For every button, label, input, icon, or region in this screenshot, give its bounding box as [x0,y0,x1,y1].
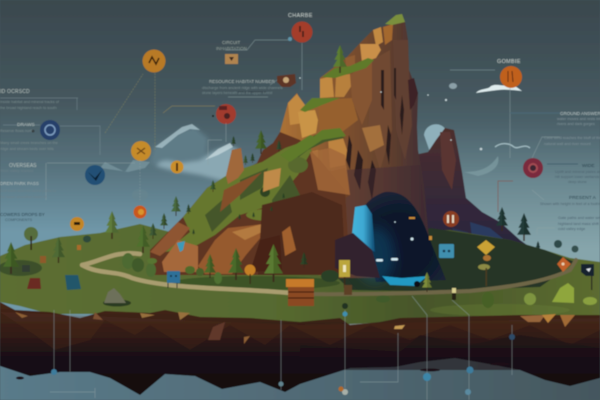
red sign [27,278,41,289]
text block: right column: deep stone [568,180,587,184]
icon: crimson badge [523,158,543,178]
text block: left column two: COWERS DROPS BY [0,212,45,217]
floating sky particles [299,77,482,150]
text block: right column: WIDE [582,163,595,169]
text block: upper centre caption: RESOURCE HABITAT NUMBER [209,79,276,84]
text block: left column two: River valley marked [0,169,33,173]
text block: left column one: Many small creek branches on the [0,141,58,145]
icon: amber badge [131,141,151,161]
text block: left column two: OVERSEAS [9,163,37,169]
text block: right column: cold valley edge [558,227,585,231]
icon: orange diamond sign [557,257,571,272]
text block: right column: PRESENT A [569,195,597,201]
orange flower tree [244,264,256,284]
forest trees [3,45,432,292]
text block: top labels: CHARBE [288,13,313,19]
clouds left [100,124,238,201]
small orange tag [40,245,81,263]
icon: yellow sign [339,260,352,295]
hillside [150,132,350,275]
road [82,253,576,294]
icon: orange badge [142,50,166,72]
callout nodes [32,37,515,395]
icon: dark flag sign [581,264,594,290]
blue tag on slope [177,241,185,252]
hill rock outcrops [150,148,350,275]
text block: top labels: GOMBIE [497,59,521,65]
text block: right column: rivers and dark gorges [557,122,595,126]
blue sign board [167,271,180,288]
text block: left column two: DREN PARK PASS [0,181,39,186]
text block: right column: highland land mass shift [558,222,600,226]
icon: amber blob [70,217,84,231]
text block: top labels: CIRCUIT [222,40,240,45]
icon: orange badge right [500,66,522,88]
text block: top labels: INHABITATION [216,46,247,51]
text block: top labels [216,13,521,65]
text block: left column two: COMPONENTS [5,218,33,222]
soil cross-section [0,302,600,395]
text block: upper centre caption [202,79,283,95]
tower top greens [280,14,405,162]
text block: upper centre caption: discharge from ancient ridge with wide channels [202,86,283,90]
text block: left column two: Soft earth and rich stone paths to [0,189,56,193]
text block: left column two: the lower shoreline basin of [0,195,47,199]
text block: left column one: DRAWS [17,122,35,128]
tan lit rock facets [288,24,393,215]
round trees and bushes [24,227,597,309]
text block: upper centre caption: stone layers beneath and the upper forest [202,91,273,95]
text block: left column one: ridge and stream beds over hills [0,147,54,151]
icon: brown badge [277,74,296,87]
icon: navy badge [40,120,60,140]
text block: left column one: Inside habitat and mineral tracks of [0,100,60,104]
clouds right [424,83,530,176]
icon: yellow diamond sign [477,240,495,286]
icon: red badge middle [216,104,236,124]
teal sign [65,275,81,290]
tower ridges [327,40,428,278]
dark green hill shading [205,130,345,235]
right distant peak [400,128,545,285]
text block: right column: GROUND ANSWER [560,111,600,116]
text block: left column one: the broad highland reach to south [0,106,57,110]
icon: cave badge [443,211,459,227]
distant hill trees right [496,207,578,272]
cave with waterfall [335,192,446,287]
icon: blue bird badge [85,165,105,185]
text block: left column one: Reserve flows north [0,129,34,133]
icon: small lantern [452,288,456,300]
icon: tan card [225,54,238,64]
icon: red badge top [292,22,312,42]
text block: right column: Shown with height in feet of a foothill [540,202,600,206]
text block: right column: natural wall and river mount [544,142,592,146]
dark sign [22,265,30,272]
text block: left column one: ID OCRSCD [0,89,30,95]
ground grass [0,224,600,324]
text block: right column [540,111,600,231]
text block: left column one [0,89,60,151]
icon: blue square [439,244,454,258]
hut [286,279,314,306]
green hill slope [165,142,312,252]
icon: amber small badge [170,160,184,174]
icon: orange ring [134,206,146,218]
text block: left column two [0,163,56,222]
